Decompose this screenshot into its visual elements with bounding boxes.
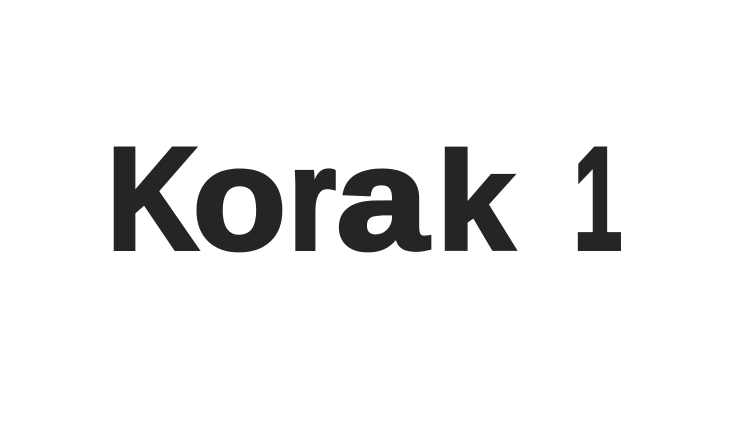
title: Korak 1: o bbox=[193, 116, 286, 280]
title: Korak 1: r bbox=[288, 117, 336, 280]
title: Korak 1: 1 bbox=[574, 117, 622, 281]
title: Korak 1: a bbox=[336, 118, 429, 281]
title: Korak 1: K bbox=[107, 116, 198, 280]
title: Korak 1: k bbox=[437, 124, 515, 279]
title: Korak 1 bbox=[107, 116, 622, 281]
